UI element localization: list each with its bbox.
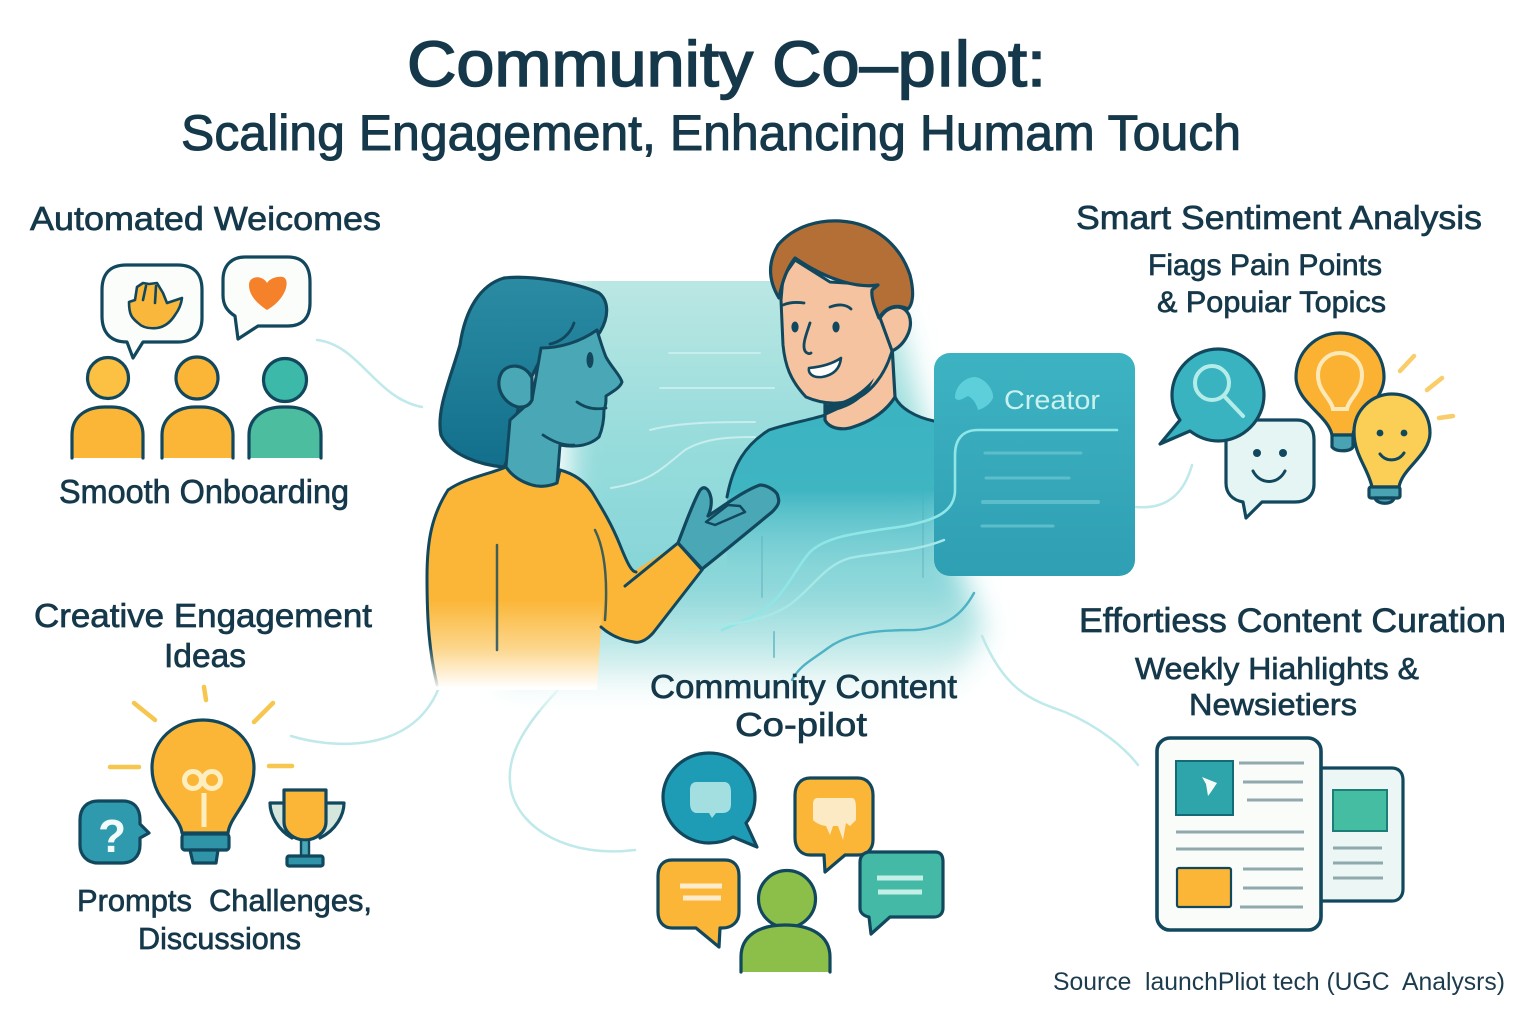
subheading: Weekly Hiahlights & [1135, 651, 1419, 686]
front document [1157, 738, 1321, 930]
woman: forearm [601, 543, 702, 642]
title [181, 28, 1241, 161]
man: face [781, 260, 892, 403]
trophy [270, 790, 344, 866]
person 1 [72, 358, 143, 458]
caption: Discussions [138, 921, 301, 956]
round teal bubble [663, 753, 757, 847]
panel: automated welcomes [30, 200, 381, 510]
subheading: Newsietiers [1189, 687, 1357, 722]
central illustration [427, 221, 1135, 700]
panel: creative engagement [34, 597, 372, 956]
heading: Automated Weicomes [30, 200, 381, 237]
source note: Source launchPliot tech (UGC Analysrs) [1053, 968, 1505, 996]
woman: hand [678, 485, 779, 569]
heading: Smart Sentiment Analysis [1076, 199, 1482, 236]
teal bubble [860, 852, 943, 934]
question bubble [80, 801, 149, 863]
man: hair [771, 221, 913, 318]
panel: effortless content curation [1079, 602, 1506, 930]
panel: smart sentiment analysis [1076, 199, 1482, 518]
creator panel [934, 353, 1135, 576]
light rays [1400, 356, 1453, 418]
title: Community Co–pılot: [407, 28, 1046, 100]
woman: neck and face [506, 330, 622, 486]
yellow bulb [1354, 394, 1430, 503]
heading: Creative Engagement [34, 597, 372, 634]
man: chin shadow [825, 378, 874, 416]
heading: Co-pilot [735, 706, 867, 743]
panel logo [955, 377, 993, 410]
panel text lines [982, 453, 1098, 526]
heading: Ideas [164, 637, 246, 674]
orange bulb [1296, 333, 1384, 451]
orange left bubble [658, 860, 739, 947]
person 2 [162, 357, 233, 458]
man: shirt [727, 397, 934, 575]
connector lines [291, 340, 1192, 851]
man: ear [880, 307, 910, 351]
speech bubble with heart [223, 257, 310, 339]
caption: Smooth Onboarding [59, 473, 349, 510]
title: Scaling Engagement, Enhancing Humam Touch [181, 105, 1241, 161]
green person [741, 870, 830, 972]
person 3 [249, 358, 321, 458]
speech bubble with waving hand [102, 265, 202, 358]
woman: features [543, 323, 606, 445]
faint flow lines [611, 353, 923, 657]
man: facial features [783, 302, 851, 377]
panel label: Creator [1004, 385, 1100, 415]
man: neck [825, 345, 895, 429]
subheading [1148, 249, 1386, 319]
woman: ear [499, 366, 532, 407]
panel: community content co-pilot [650, 668, 957, 972]
woman: sweater [427, 467, 702, 690]
caption: Prompts Challenges, [77, 883, 372, 918]
magnifier bubble [1160, 349, 1264, 444]
smiling bubble [1226, 420, 1314, 518]
heading [34, 597, 372, 674]
question bubble: ? [98, 810, 126, 862]
heading: Effortiess Content Curation [1079, 602, 1506, 640]
orange bubble [795, 778, 873, 872]
woman: hair [440, 277, 607, 467]
heading [650, 668, 957, 743]
heading: Community Content [650, 668, 957, 705]
subheading: & Popuiar Topics [1157, 286, 1386, 319]
subheading [1135, 651, 1419, 722]
light rays [110, 687, 292, 767]
data flow curves [680, 430, 1117, 680]
subheading: Fiags Pain Points [1148, 249, 1382, 282]
background wash [500, 230, 985, 700]
light bulb [152, 720, 254, 863]
back document [1318, 768, 1403, 901]
caption [77, 883, 372, 956]
